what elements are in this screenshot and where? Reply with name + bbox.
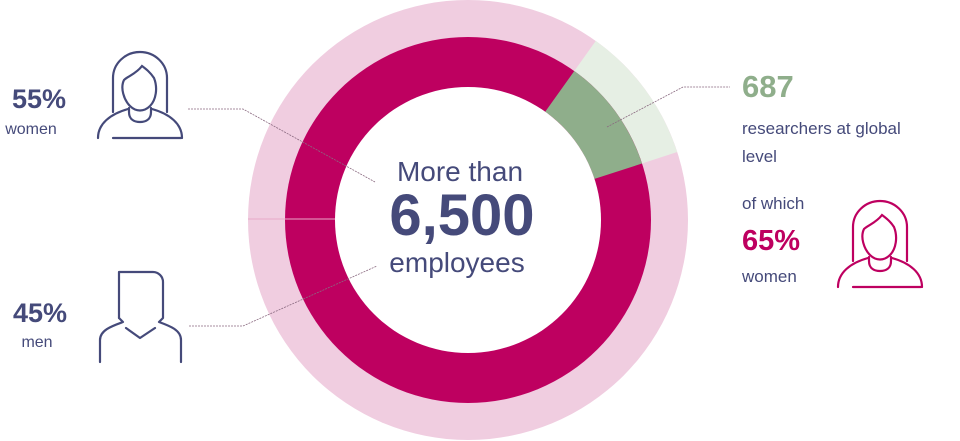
inner ring segment: researchers (545, 71, 642, 179)
outer ring segment: researchers (574, 41, 677, 164)
researchers stat: researchers at global (742, 119, 901, 138)
icon: man (100, 272, 181, 362)
researchers stat: level (742, 147, 777, 166)
women stat: 55% (12, 84, 66, 114)
researchers stat (741, 69, 901, 286)
center text: employees (389, 247, 525, 278)
inner ring (285, 37, 651, 403)
outer ring (248, 0, 688, 440)
researchers stat: women (741, 267, 797, 286)
icon: woman (98, 52, 182, 138)
icon: woman researcher (838, 201, 922, 287)
women stat (4, 84, 66, 138)
men stat (13, 298, 67, 351)
leader lines (188, 87, 730, 326)
researchers stat: of which (742, 194, 804, 213)
women stat: women (4, 121, 57, 138)
center text: More than (397, 156, 523, 187)
men stat: men (21, 334, 53, 351)
center text (389, 156, 535, 278)
men stat: 45% (13, 298, 67, 328)
researchers stat: 687 (742, 69, 794, 104)
center text: 6,500 (389, 183, 535, 248)
donut chart (248, 0, 688, 440)
researchers stat: 65% (742, 225, 800, 257)
